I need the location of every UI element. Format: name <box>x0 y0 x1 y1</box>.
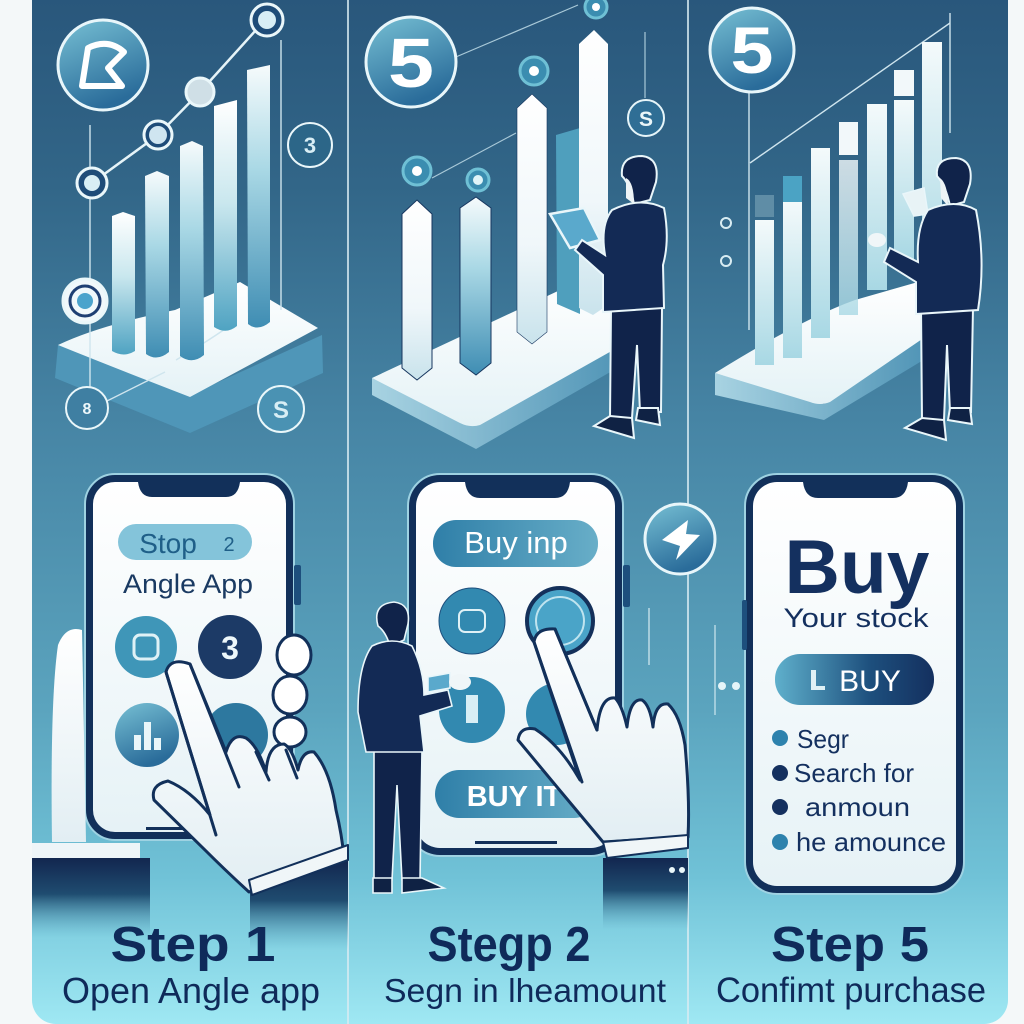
chart nodes <box>63 4 332 432</box>
platform <box>55 282 323 433</box>
app icons: 3 <box>221 630 239 666</box>
connector lines <box>749 13 950 330</box>
buy it pill <box>435 770 598 818</box>
panel: step 3 chart <box>710 8 982 440</box>
buy it pill: BUY IT <box>467 781 562 813</box>
panel: step 1 chart <box>55 4 332 433</box>
step badge: 5 <box>730 13 774 87</box>
app name: Angle App <box>123 569 253 599</box>
caption: step 1: Step 1 <box>110 918 276 972</box>
bars <box>402 30 608 380</box>
step badge <box>58 20 148 110</box>
bullet list: he amounce <box>796 827 946 857</box>
step badge: 5 <box>388 24 434 102</box>
sleeve right <box>603 858 688 930</box>
buy button <box>775 654 934 705</box>
column dividers <box>348 0 688 1024</box>
chart nodes <box>721 218 731 266</box>
side badge <box>645 504 715 574</box>
caption: step 3: Step 5 <box>771 918 929 972</box>
fingers right <box>273 635 311 747</box>
phone body <box>85 474 301 840</box>
phone body <box>742 474 964 894</box>
caption: step 3: Confimt purchase <box>716 971 986 1010</box>
node labels: 3 <box>304 133 316 158</box>
app icons <box>115 615 268 767</box>
subheading: Your stock <box>784 603 929 633</box>
panel: step 2 chart <box>366 0 667 449</box>
platform <box>715 280 950 420</box>
sleeve right <box>250 860 348 950</box>
caption: step 3 <box>716 918 986 1010</box>
bullet list: Segr <box>797 724 849 754</box>
chart nodes <box>403 0 664 191</box>
pointing hand <box>153 662 348 895</box>
buy pill: Buy inp <box>464 525 568 560</box>
bullet list: Search for <box>794 758 914 788</box>
connector lines <box>90 40 281 402</box>
step badge <box>710 8 794 92</box>
bullet list <box>772 724 946 857</box>
cuff left <box>32 843 140 858</box>
caption: step 2: Stegp 2 <box>428 918 590 972</box>
buy heading: Buy <box>784 525 930 610</box>
caption: step 1 <box>62 918 320 1011</box>
person with tablet <box>550 156 667 438</box>
buy button: BUY <box>839 665 901 698</box>
pointing hand <box>518 629 689 858</box>
bars <box>755 42 942 365</box>
panel: phone 2 <box>358 474 715 930</box>
caption: step 2 <box>384 918 666 1009</box>
person with phone <box>358 602 471 893</box>
trend line <box>92 20 265 183</box>
panel: phone 1 <box>32 474 348 950</box>
panel: phone 3 <box>714 474 964 894</box>
node labels <box>83 133 316 424</box>
bars <box>112 65 270 360</box>
buy pill <box>433 520 598 567</box>
bullet list: anmoun <box>805 792 910 822</box>
side mark <box>648 608 650 665</box>
step badge <box>366 17 456 107</box>
phone body <box>408 474 630 856</box>
sleeve left <box>32 858 150 938</box>
caption: step 2: Segn in lheamount <box>384 972 666 1009</box>
node labels: S <box>273 397 289 424</box>
platform <box>372 276 640 449</box>
person with tablet <box>868 158 982 440</box>
side marks <box>714 625 740 715</box>
back hand <box>52 629 86 842</box>
pill label <box>118 524 252 560</box>
pill label: 2 <box>223 534 235 556</box>
pill label: Stop <box>139 528 197 559</box>
icons <box>439 588 593 745</box>
node label: S <box>639 108 653 131</box>
sleeve dots <box>669 867 685 873</box>
caption: step 1: Open Angle app <box>62 970 320 1011</box>
node labels: 8 <box>83 401 92 418</box>
connector lines <box>430 5 645 178</box>
